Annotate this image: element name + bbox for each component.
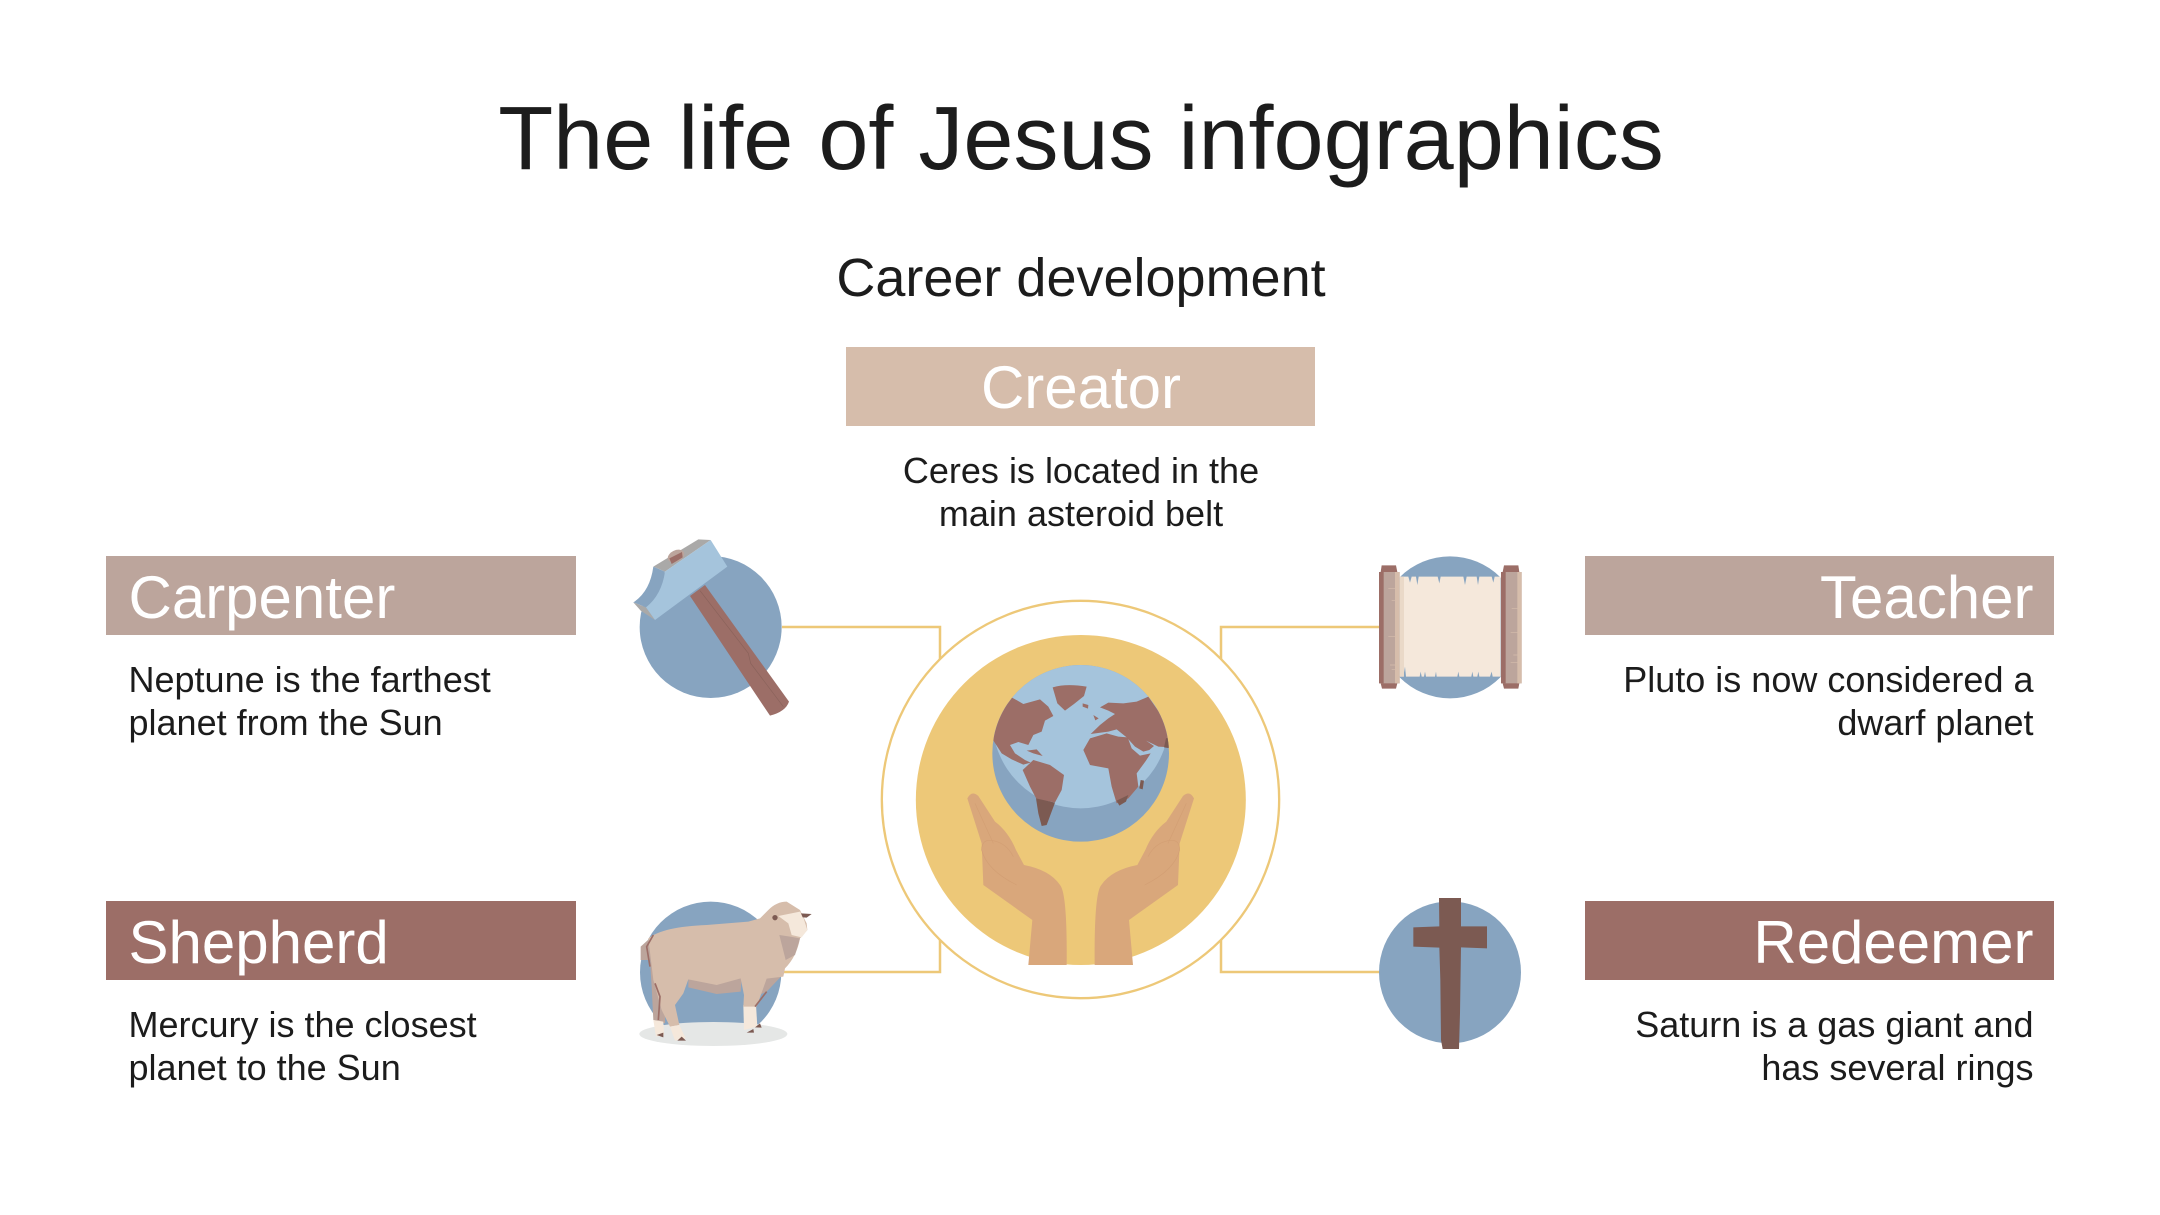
connector lines <box>782 627 1379 972</box>
icon: sheep <box>639 902 812 1046</box>
panel: shepherd: Mercury is the closest <box>128 1004 477 1045</box>
panel: carpenter: planet from the Sun <box>128 702 443 743</box>
panel: redeemer: Redeemer <box>1753 909 2034 976</box>
panel: redeemer <box>1585 901 2054 1088</box>
subtitle: Career development <box>836 248 1326 308</box>
panel: creator: Ceres is located in the <box>903 450 1259 491</box>
panel: teacher: dwarf planet <box>1837 702 2034 743</box>
central illustration: hands holding globe <box>882 601 1279 998</box>
title: The life of Jesus infographics <box>498 89 1664 189</box>
panel: teacher: Pluto is now considered a <box>1623 659 2034 700</box>
panel: creator: Creator <box>981 354 1181 421</box>
panel: redeemer: Saturn is a gas giant and <box>1635 1004 2034 1045</box>
icon: scroll <box>1379 556 1522 698</box>
panel: shepherd <box>106 901 576 1088</box>
panel: teacher <box>1585 556 2054 743</box>
panel: shepherd: planet to the Sun <box>128 1047 401 1088</box>
panel: carpenter: Carpenter <box>128 564 395 631</box>
panel: creator <box>846 347 1315 534</box>
panel: creator: main asteroid belt <box>939 493 1223 534</box>
panel: teacher: Teacher <box>1820 564 2034 631</box>
icon: hammer <box>633 539 789 716</box>
panel: redeemer: has several rings <box>1761 1047 2034 1088</box>
panel: carpenter <box>106 556 576 743</box>
icon: cross <box>1379 898 1521 1049</box>
panel: shepherd: Shepherd <box>128 909 389 976</box>
panel: carpenter: Neptune is the farthest <box>128 659 491 700</box>
